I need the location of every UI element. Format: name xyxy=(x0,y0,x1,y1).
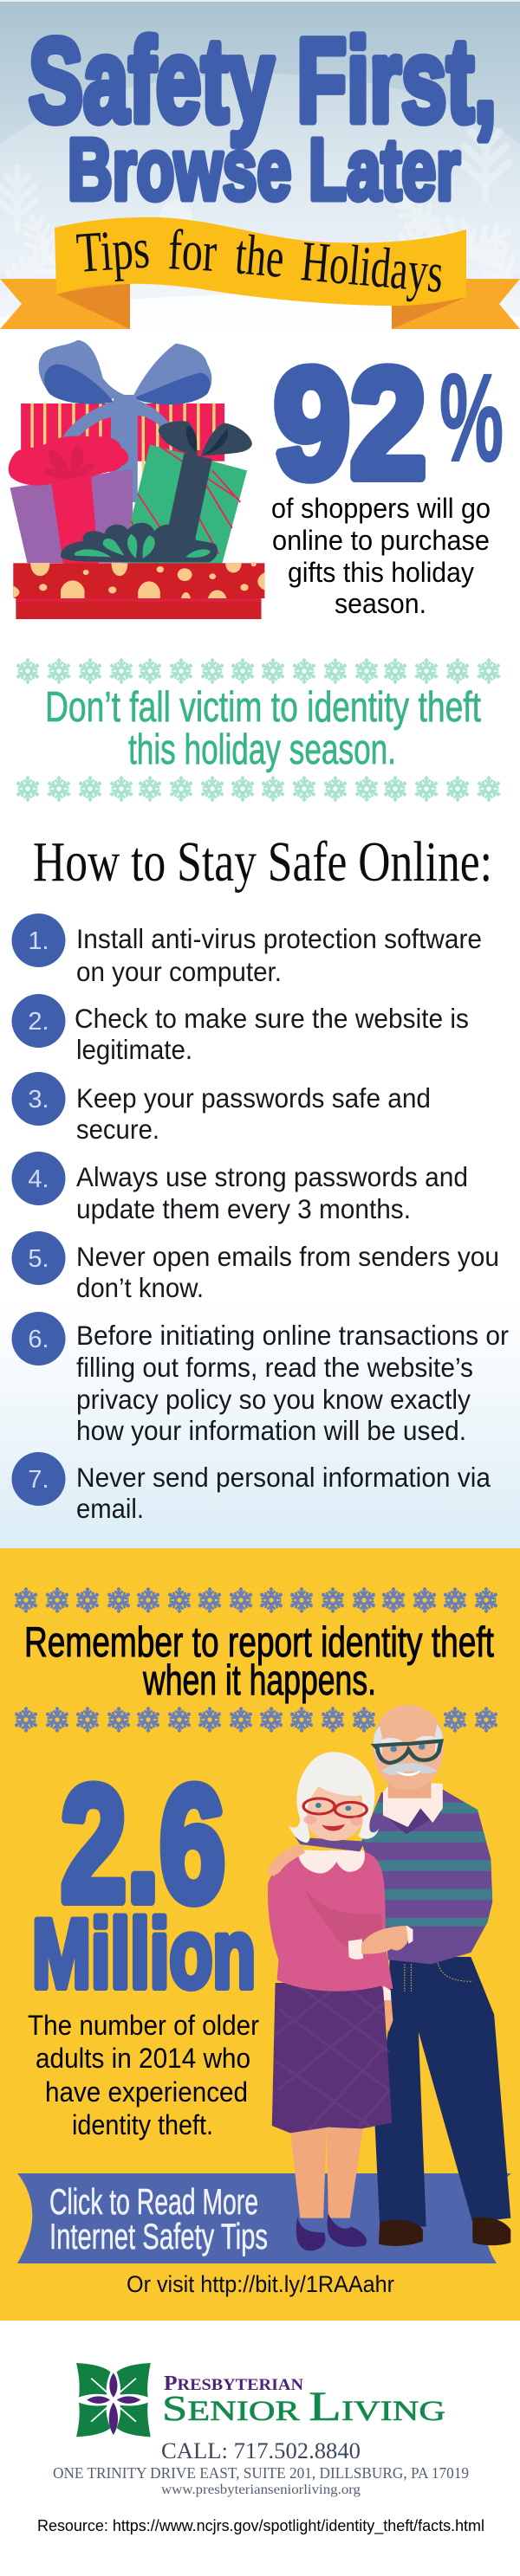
tip 4: Always use strong passwords and xyxy=(76,1161,468,1192)
tip 2: legitimate. xyxy=(76,1034,192,1065)
stat description xyxy=(28,2010,259,2140)
heading: remember to report xyxy=(24,1619,494,1704)
woman xyxy=(267,1752,413,2250)
tip 6: privacy policy so you know exactly xyxy=(76,1384,471,1415)
stat description: The number of older xyxy=(28,2010,259,2041)
call to action banner: Internet Safety Tips xyxy=(49,2216,268,2256)
banner text: Tips xyxy=(75,216,152,285)
tip 5: Never open emails from senders you xyxy=(76,1241,499,1272)
tip 4 xyxy=(12,1152,468,1224)
call to action banner xyxy=(17,2173,511,2263)
ribbon banner xyxy=(0,216,520,329)
stat: 2.6 million: Million xyxy=(32,1900,256,2008)
tip 2: 2. xyxy=(28,1008,49,1036)
panel: winter header background xyxy=(0,0,520,450)
icon: flower xyxy=(76,2363,151,2437)
illustration: gift boxes xyxy=(9,340,264,619)
tip 1: Install anti-virus protection software xyxy=(76,923,482,954)
stat: 92 percent xyxy=(271,337,504,619)
stat caption: of shoppers will go xyxy=(271,493,491,524)
tip 1: on your computer. xyxy=(76,956,282,987)
tip 7 xyxy=(12,1452,491,1524)
tip 7: email. xyxy=(76,1493,144,1524)
snowflake border: blue bottom xyxy=(13,1707,499,1733)
tip 4: update them every 3 months. xyxy=(76,1193,411,1224)
stat description: have experienced xyxy=(45,2076,248,2108)
call to action banner: Click to Read More xyxy=(49,2181,258,2222)
tip 6: 6. xyxy=(28,1326,49,1353)
tip 6: Before initiating online transactions or xyxy=(76,1320,509,1351)
tip 3 xyxy=(12,1072,431,1145)
snowflake border: blue top xyxy=(13,1587,499,1613)
stat caption: online to purchase xyxy=(272,525,490,556)
tip 5: don’t know. xyxy=(76,1272,204,1303)
stat caption xyxy=(271,493,491,619)
contact details: www.presbyterianseniorliving.org xyxy=(161,2482,361,2497)
tip 4: 4. xyxy=(28,1165,49,1193)
tip 5 xyxy=(12,1231,499,1303)
tip 2: Check to make sure the website is xyxy=(75,1003,469,1034)
contact details xyxy=(53,2438,469,2497)
contact details: CALL: 717.502.8840 xyxy=(161,2438,361,2463)
tip 3: secure. xyxy=(76,1114,159,1145)
banner text: Holidays xyxy=(299,229,445,305)
snowflake border: green bottom xyxy=(15,776,502,802)
tip 6: how your information will be used. xyxy=(76,1415,466,1446)
stat: 2.6 million xyxy=(32,1753,256,2008)
green heading: this holiday season. xyxy=(128,726,396,773)
snowflake border: green top xyxy=(15,658,502,684)
banner text xyxy=(75,216,445,305)
tip 7: 7. xyxy=(28,1466,49,1494)
resource citation: Resource: https://www.ncjrs.gov/spotlight/identity_theft/facts.html xyxy=(37,2517,484,2535)
illustration: senior couple xyxy=(267,1705,510,2250)
logo: presbyterian senior living xyxy=(76,2363,445,2437)
tips list xyxy=(12,914,509,1524)
logo: presbyterian senior living: SENIOR L IVING xyxy=(162,2384,445,2430)
tip 1: 1. xyxy=(28,927,49,955)
green heading xyxy=(45,684,481,773)
title xyxy=(29,15,497,218)
logo: presbyterian senior living: PRESBYTERIAN xyxy=(164,2373,303,2395)
tip 7: Never send personal information via xyxy=(76,1462,491,1493)
panel: yellow section xyxy=(0,1548,520,2321)
man xyxy=(358,1705,510,2246)
stat: 2.6 million: 2.6 xyxy=(61,1753,225,1936)
heading: remember to report: when it happens. xyxy=(142,1657,376,1704)
stat caption: season. xyxy=(335,588,426,619)
panel: list background xyxy=(0,1299,520,1548)
banner text: the xyxy=(233,223,287,290)
contact details: ONE TRINITY DRIVE EAST, SUITE 201, DILLSBURG, PA 17019 xyxy=(53,2464,469,2482)
tip 6 xyxy=(12,1312,509,1446)
tip 3: 3. xyxy=(28,1086,49,1114)
stat: 92 percent: 92 xyxy=(274,337,426,511)
stat description: identity theft. xyxy=(72,2109,213,2140)
tip 3: Keep your passwords safe and xyxy=(76,1082,431,1114)
tip 1 xyxy=(12,914,482,987)
stat description: adults in 2014 who xyxy=(36,2043,250,2074)
tip 5: 5. xyxy=(28,1245,49,1273)
or visit link: Or visit http://bit.ly/1RAAahr xyxy=(127,2271,394,2297)
tip 2 xyxy=(12,994,469,1065)
stat caption: gifts this holiday xyxy=(288,557,474,588)
banner text: for xyxy=(166,218,218,284)
tip 6: filling out forms, read the website’s xyxy=(76,1352,473,1383)
